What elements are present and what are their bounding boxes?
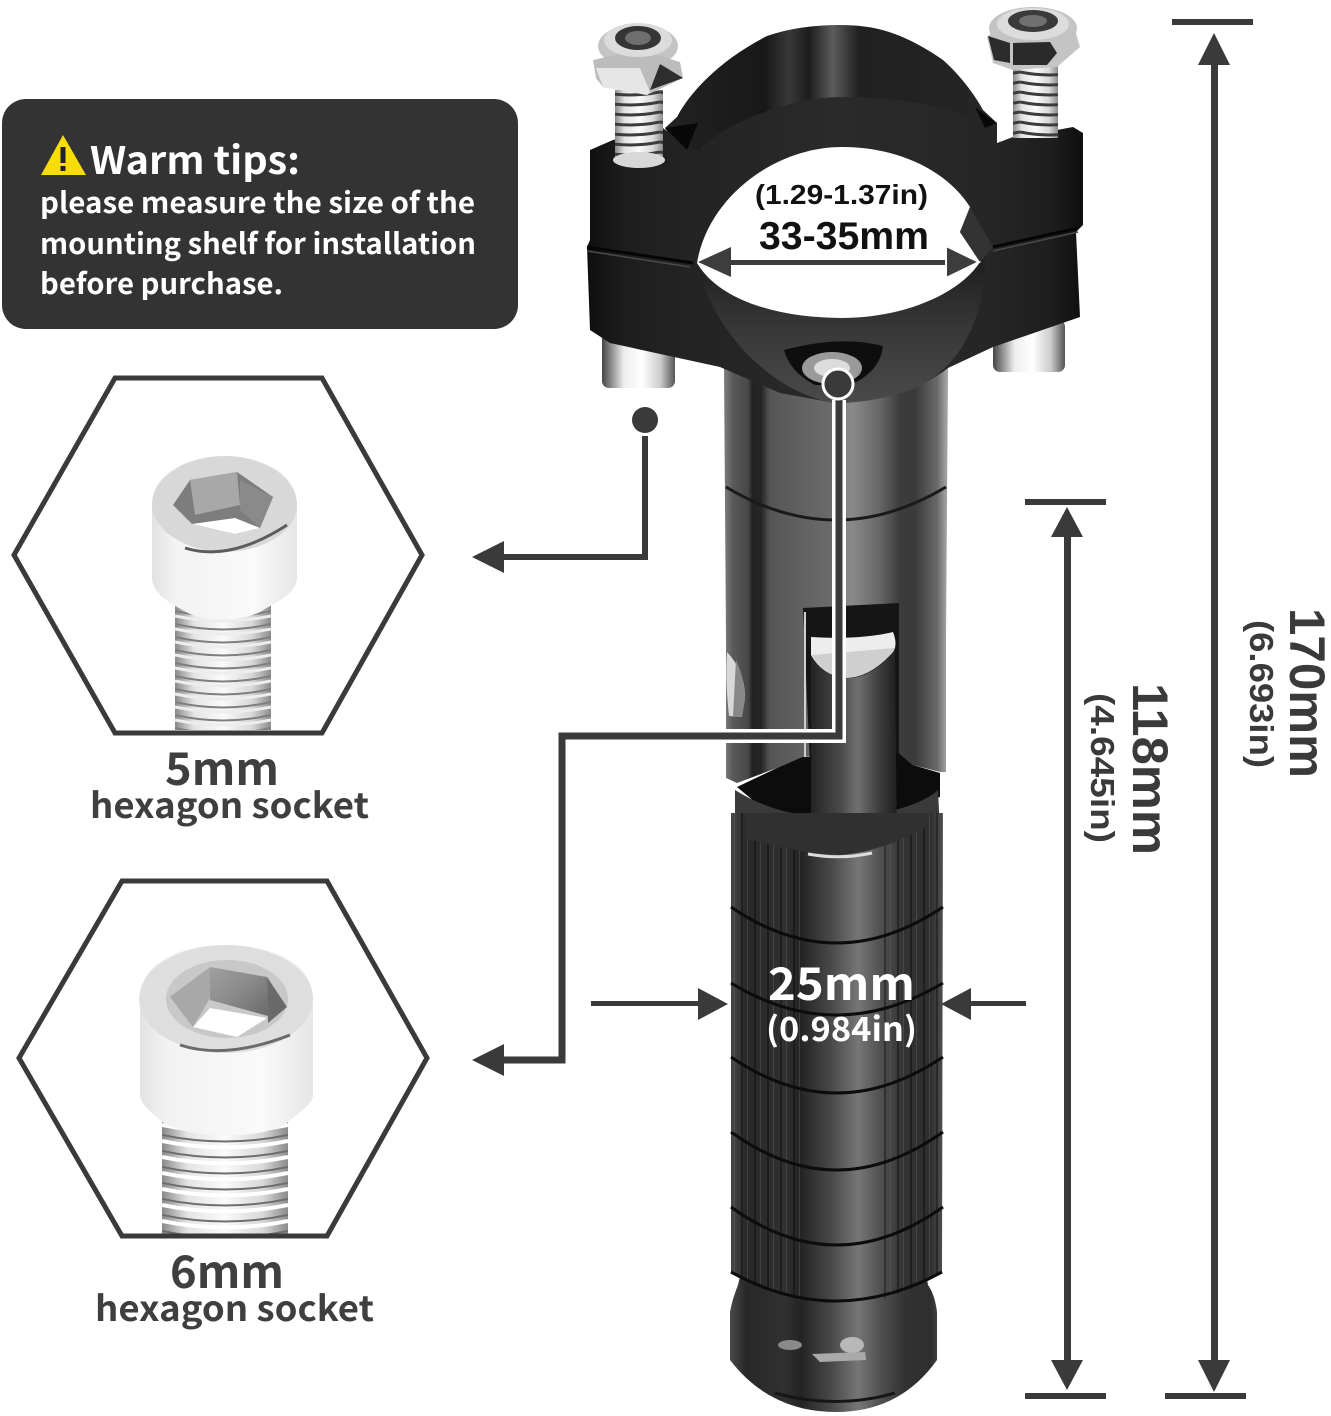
bolt: 6mm socket head xyxy=(139,945,313,1235)
product: folding mount xyxy=(587,7,1083,1412)
stem lower forks xyxy=(726,600,946,783)
label: 118mm: (4.645in) xyxy=(1084,693,1121,843)
label: 5mm hexagon socket: 5mm xyxy=(165,733,279,798)
icon: warning triangle xyxy=(41,135,86,175)
dark opening right xyxy=(893,753,940,812)
text block: tip body: before purchase. xyxy=(40,261,283,303)
arrows: grip width xyxy=(591,988,1026,1020)
heading: warm tips: Warm tips: xyxy=(90,130,300,185)
stem xyxy=(724,365,948,640)
bolt: left screw and nut xyxy=(593,23,683,168)
label: 170mm xyxy=(1243,608,1331,778)
inner cylinder xyxy=(811,650,897,856)
clamp hole xyxy=(697,147,980,318)
clamp notch left xyxy=(665,123,698,150)
panel: 6mm bolt hexagon xyxy=(19,881,427,1274)
right jaw highlight xyxy=(960,207,993,262)
arrow: clamp inner diameter xyxy=(698,246,979,278)
label: clamp diameter: 33-35mm xyxy=(759,215,929,258)
bolt: 5mm socket head xyxy=(152,456,297,730)
label: 118mm: 118mm xyxy=(1122,683,1178,855)
bolt: right screw and nut xyxy=(987,7,1080,138)
dimension: 118mm xyxy=(1025,499,1106,1399)
clamp front body xyxy=(587,97,1083,403)
panel: warm tips xyxy=(2,99,518,329)
end cap xyxy=(730,1268,937,1412)
grip xyxy=(731,813,943,1301)
label: 5mm hexagon socket: hexagon socket xyxy=(90,778,369,829)
bolt: lower left end xyxy=(602,330,675,388)
folding pin xyxy=(811,632,896,678)
text block: tip body: mounting shelf for installation xyxy=(40,221,476,263)
label: 6mm hexagon socket xyxy=(95,1236,374,1332)
label: 6mm hexagon socket: 6mm xyxy=(170,1236,284,1301)
bolt: lower right end xyxy=(993,320,1065,372)
label: 170mm: (6.693in) xyxy=(1243,620,1280,768)
label: 5mm hexagon socket xyxy=(90,733,369,829)
label: grip diameter: (0.984in) xyxy=(766,1003,917,1051)
panel: 5mm bolt hexagon xyxy=(14,378,422,761)
text block: tip body: please measure the size of the xyxy=(40,180,475,222)
dimension: 170mm xyxy=(1165,19,1253,1399)
label: 6mm hexagon socket: hexagon socket xyxy=(95,1281,374,1332)
slot xyxy=(803,603,899,765)
collar xyxy=(735,790,941,852)
callout: 6mm bolt pointer xyxy=(472,369,853,1076)
label: clamp diameter: (1.29-1.37in) xyxy=(755,179,928,210)
screw pocket xyxy=(784,341,883,385)
callout: 5mm bolt pointer xyxy=(472,407,658,573)
bowl xyxy=(697,258,985,403)
label: grip diameter: 25mm xyxy=(768,948,915,1013)
clamp notch right xyxy=(975,107,997,128)
clamp split lines xyxy=(587,228,1078,263)
socket screw xyxy=(802,352,862,384)
clamp back arc xyxy=(665,25,997,170)
pivot screw xyxy=(726,652,745,717)
label: clamp diameter xyxy=(755,179,929,258)
label: 118mm xyxy=(1084,683,1178,855)
dark opening left xyxy=(737,757,816,816)
text block: tip body xyxy=(40,180,476,303)
label: grip diameter xyxy=(766,948,917,1051)
